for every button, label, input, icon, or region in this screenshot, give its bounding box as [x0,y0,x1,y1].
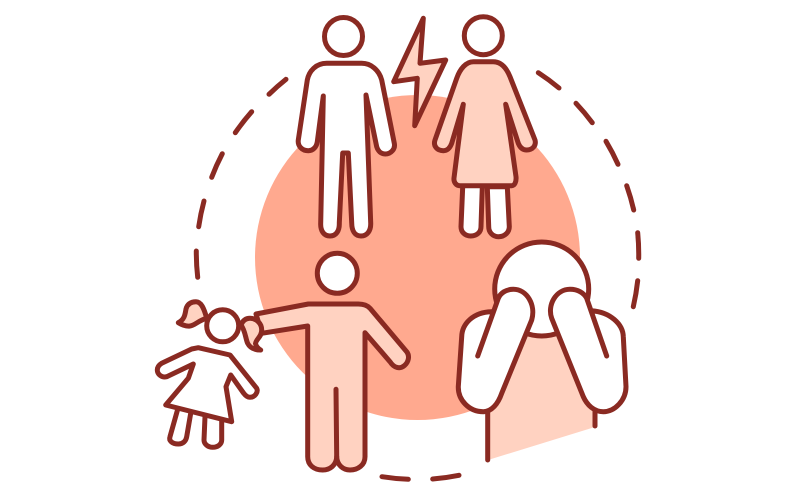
crying woman head [495,242,589,336]
girl head [207,310,239,342]
crying woman figure [458,242,626,460]
girl figure [157,302,262,447]
man figure [298,18,394,236]
woman figure [434,17,535,237]
dashed ring [196,73,639,479]
girl left pigtail [178,302,207,326]
girl dress [157,348,257,422]
girl legs [170,411,222,447]
lightning bolt [394,18,446,126]
parent figure pulling pigtail [256,253,409,470]
background circle [255,95,580,420]
crying woman body edges [488,412,595,460]
left arm covering face [458,289,533,412]
crying woman body [488,333,595,460]
right arm covering face [550,289,626,412]
girl right pigtail [241,318,262,350]
